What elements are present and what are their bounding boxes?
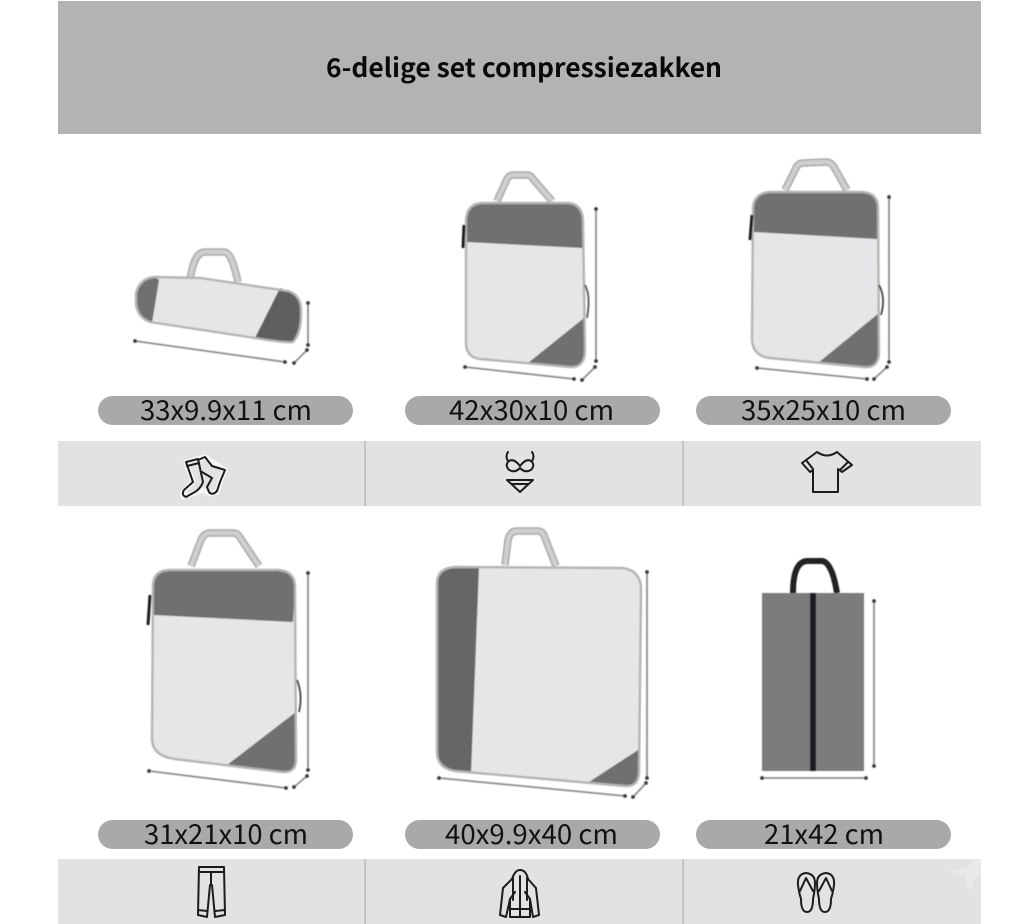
size label: 42x30x10 cm — [405, 389, 660, 428]
bag 3: medium compression bag — [750, 162, 889, 379]
size label: 33x9.9x11 cm — [98, 389, 353, 428]
icon: jacket — [500, 870, 539, 917]
bag 5: extra large square bag — [437, 531, 647, 797]
size label: 21x42 cm: 21x42 cm — [764, 813, 884, 852]
dimension lines — [465, 209, 596, 380]
bag 6: shoe bag — [762, 561, 874, 778]
bag 4: large compression bag — [148, 533, 308, 788]
icon strip: row 2 — [58, 859, 981, 924]
bag 1: small roll bag — [135, 252, 308, 363]
size label: 31x21x10 cm — [98, 813, 353, 852]
size label: 35x25x10 cm: 35x25x10 cm — [741, 389, 906, 428]
dimension lines — [439, 572, 647, 797]
size label: 31x21x10 cm: 31x21x10 cm — [144, 813, 308, 852]
icon: socks — [183, 457, 225, 497]
dimension lines — [149, 573, 308, 788]
icon: underwear — [506, 452, 534, 492]
bag 2: medium compression bag — [463, 175, 596, 380]
dimension lines — [135, 303, 308, 363]
icon: t-shirt — [802, 452, 852, 492]
title: 6-delige set compressiezakken — [326, 48, 722, 85]
icon: trousers — [198, 867, 225, 917]
size label: 40x9.9x40 cm: 40x9.9x40 cm — [445, 813, 618, 852]
size label: 35x25x10 cm — [696, 389, 951, 428]
size label: 42x30x10 cm: 42x30x10 cm — [449, 389, 614, 428]
icon: flip-flops — [798, 873, 834, 912]
dimension lines — [762, 601, 874, 778]
dimension lines — [757, 197, 889, 379]
header banner — [58, 1, 981, 134]
size label: 33x9.9x11 cm: 33x9.9x11 cm — [140, 389, 312, 428]
size label: 21x42 cm — [696, 813, 951, 852]
icon strip: row 1 — [58, 441, 981, 506]
size label: 40x9.9x40 cm — [405, 813, 660, 852]
